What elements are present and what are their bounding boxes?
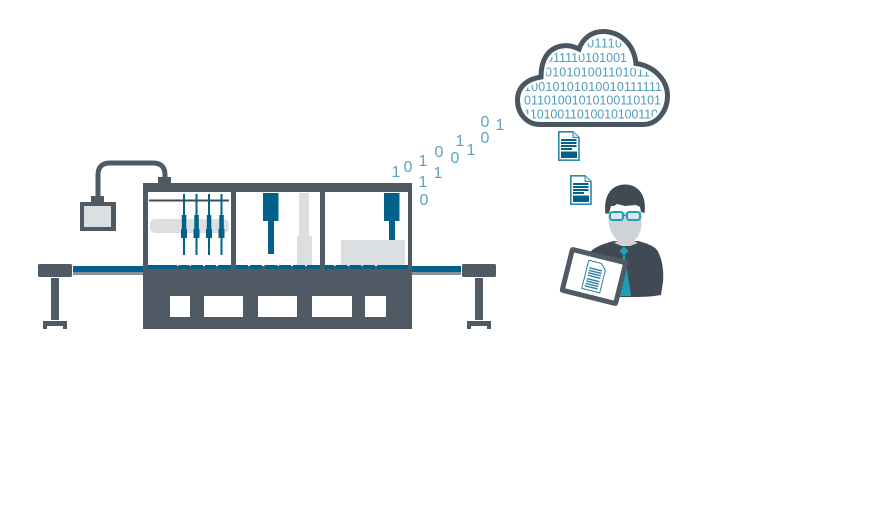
right conveyor stand	[462, 264, 496, 329]
left conveyor belt	[73, 266, 143, 275]
machine internal belt	[148, 265, 408, 269]
right conveyor belt	[412, 266, 461, 275]
binary data stream: 1	[456, 133, 465, 150]
binary data stream: 1	[419, 174, 428, 191]
document icon lower	[571, 176, 591, 204]
binary data stream: 1	[419, 153, 428, 170]
binary data stream: 0	[420, 192, 429, 209]
document icon upper	[559, 132, 579, 160]
cloud with binary data: 01101001010100110101	[524, 94, 661, 108]
cloud with binary data	[518, 32, 668, 124]
control monitor with cable	[80, 163, 171, 231]
station 3: press tool and block	[341, 193, 405, 265]
cloud with binary data: 10010101010010111111	[524, 80, 662, 94]
cloud with binary data: 01110	[587, 36, 622, 50]
binary data stream: 0	[404, 159, 413, 176]
binary data stream: 0	[481, 130, 490, 147]
binary data stream: 1	[434, 165, 443, 182]
person with glasses	[590, 184, 663, 297]
machine body	[143, 183, 412, 329]
binary data stream: 0	[481, 114, 490, 131]
infographic: machine data flowing to the cloud and a user	[38, 29, 670, 329]
binary data stream: 0	[451, 150, 460, 167]
cloud with binary data: 11010011010010100110	[524, 108, 658, 122]
left conveyor stand	[38, 264, 72, 329]
tablet with document	[559, 246, 629, 307]
station 2: press tool	[263, 193, 312, 265]
binary data stream	[392, 114, 505, 209]
cloud with binary data: 011110101001	[546, 51, 627, 65]
station 1: needle tools	[149, 194, 229, 255]
binary data stream: 0	[435, 144, 444, 161]
binary data stream: 1	[392, 164, 401, 181]
binary data stream: 1	[467, 142, 476, 159]
binary data stream: 1	[496, 117, 505, 134]
cloud with binary data: 0101010011010110	[545, 66, 657, 80]
